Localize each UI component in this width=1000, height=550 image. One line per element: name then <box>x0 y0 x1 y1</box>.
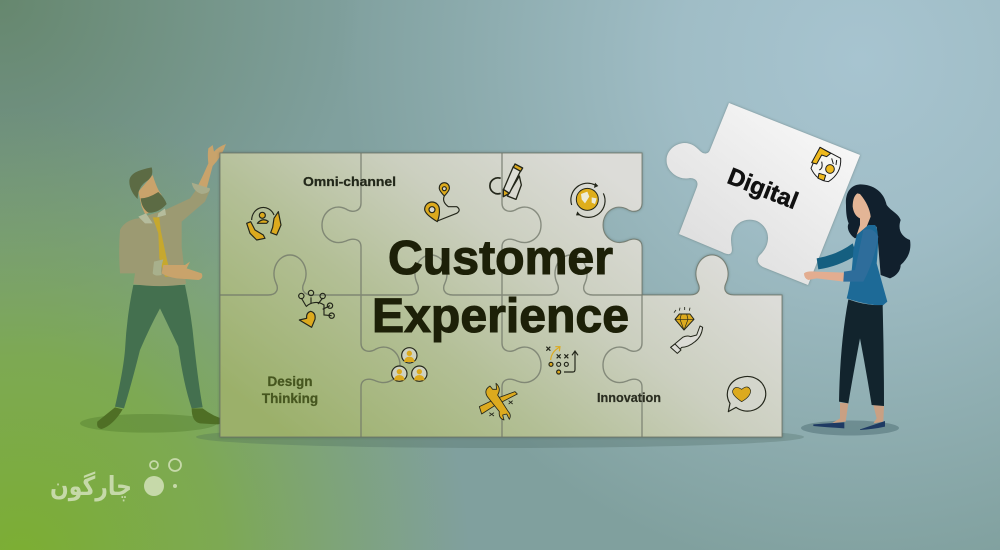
label: Innovation: Innovation <box>597 391 661 405</box>
icon: pencil and cup <box>490 164 523 199</box>
joined puzzle pieces <box>220 153 782 437</box>
icon: wrench and screwdriver <box>479 383 517 420</box>
icon: heart speech bubble <box>727 376 766 412</box>
man figure <box>80 144 226 433</box>
title: Customer Experience: Customer <box>388 232 613 285</box>
icon: three people circles <box>392 348 427 381</box>
label: Digital: Digital <box>724 163 802 215</box>
label: Design Thinking: Design <box>267 374 313 389</box>
title: Customer Experience: Experience <box>372 290 629 343</box>
icon: network of ideas <box>299 290 334 327</box>
logo <box>50 459 181 502</box>
puzzle board <box>220 153 782 437</box>
label: Design Thinking: Thinking <box>262 391 318 406</box>
icon: hands holding person <box>247 207 281 240</box>
ground shadow under puzzle <box>196 426 804 448</box>
icon: face mask <box>811 147 841 182</box>
logo dots <box>144 459 181 496</box>
icon: map pins route <box>425 183 459 222</box>
icon: diamond over hand <box>671 307 703 353</box>
label: Omni-channel: Omni-channel <box>303 174 396 189</box>
icon: playbook diagram <box>546 347 578 374</box>
interior puzzle joint lines <box>220 153 642 437</box>
puzzle piece: Digital <box>667 103 860 285</box>
title: Customer Experience <box>372 232 629 343</box>
woman figure shadow <box>801 420 899 436</box>
logo wordmark: چارگون <box>50 471 132 502</box>
label: Design Thinking <box>262 374 318 406</box>
woman figure <box>804 184 910 430</box>
icon: globe with arrows <box>571 183 605 217</box>
